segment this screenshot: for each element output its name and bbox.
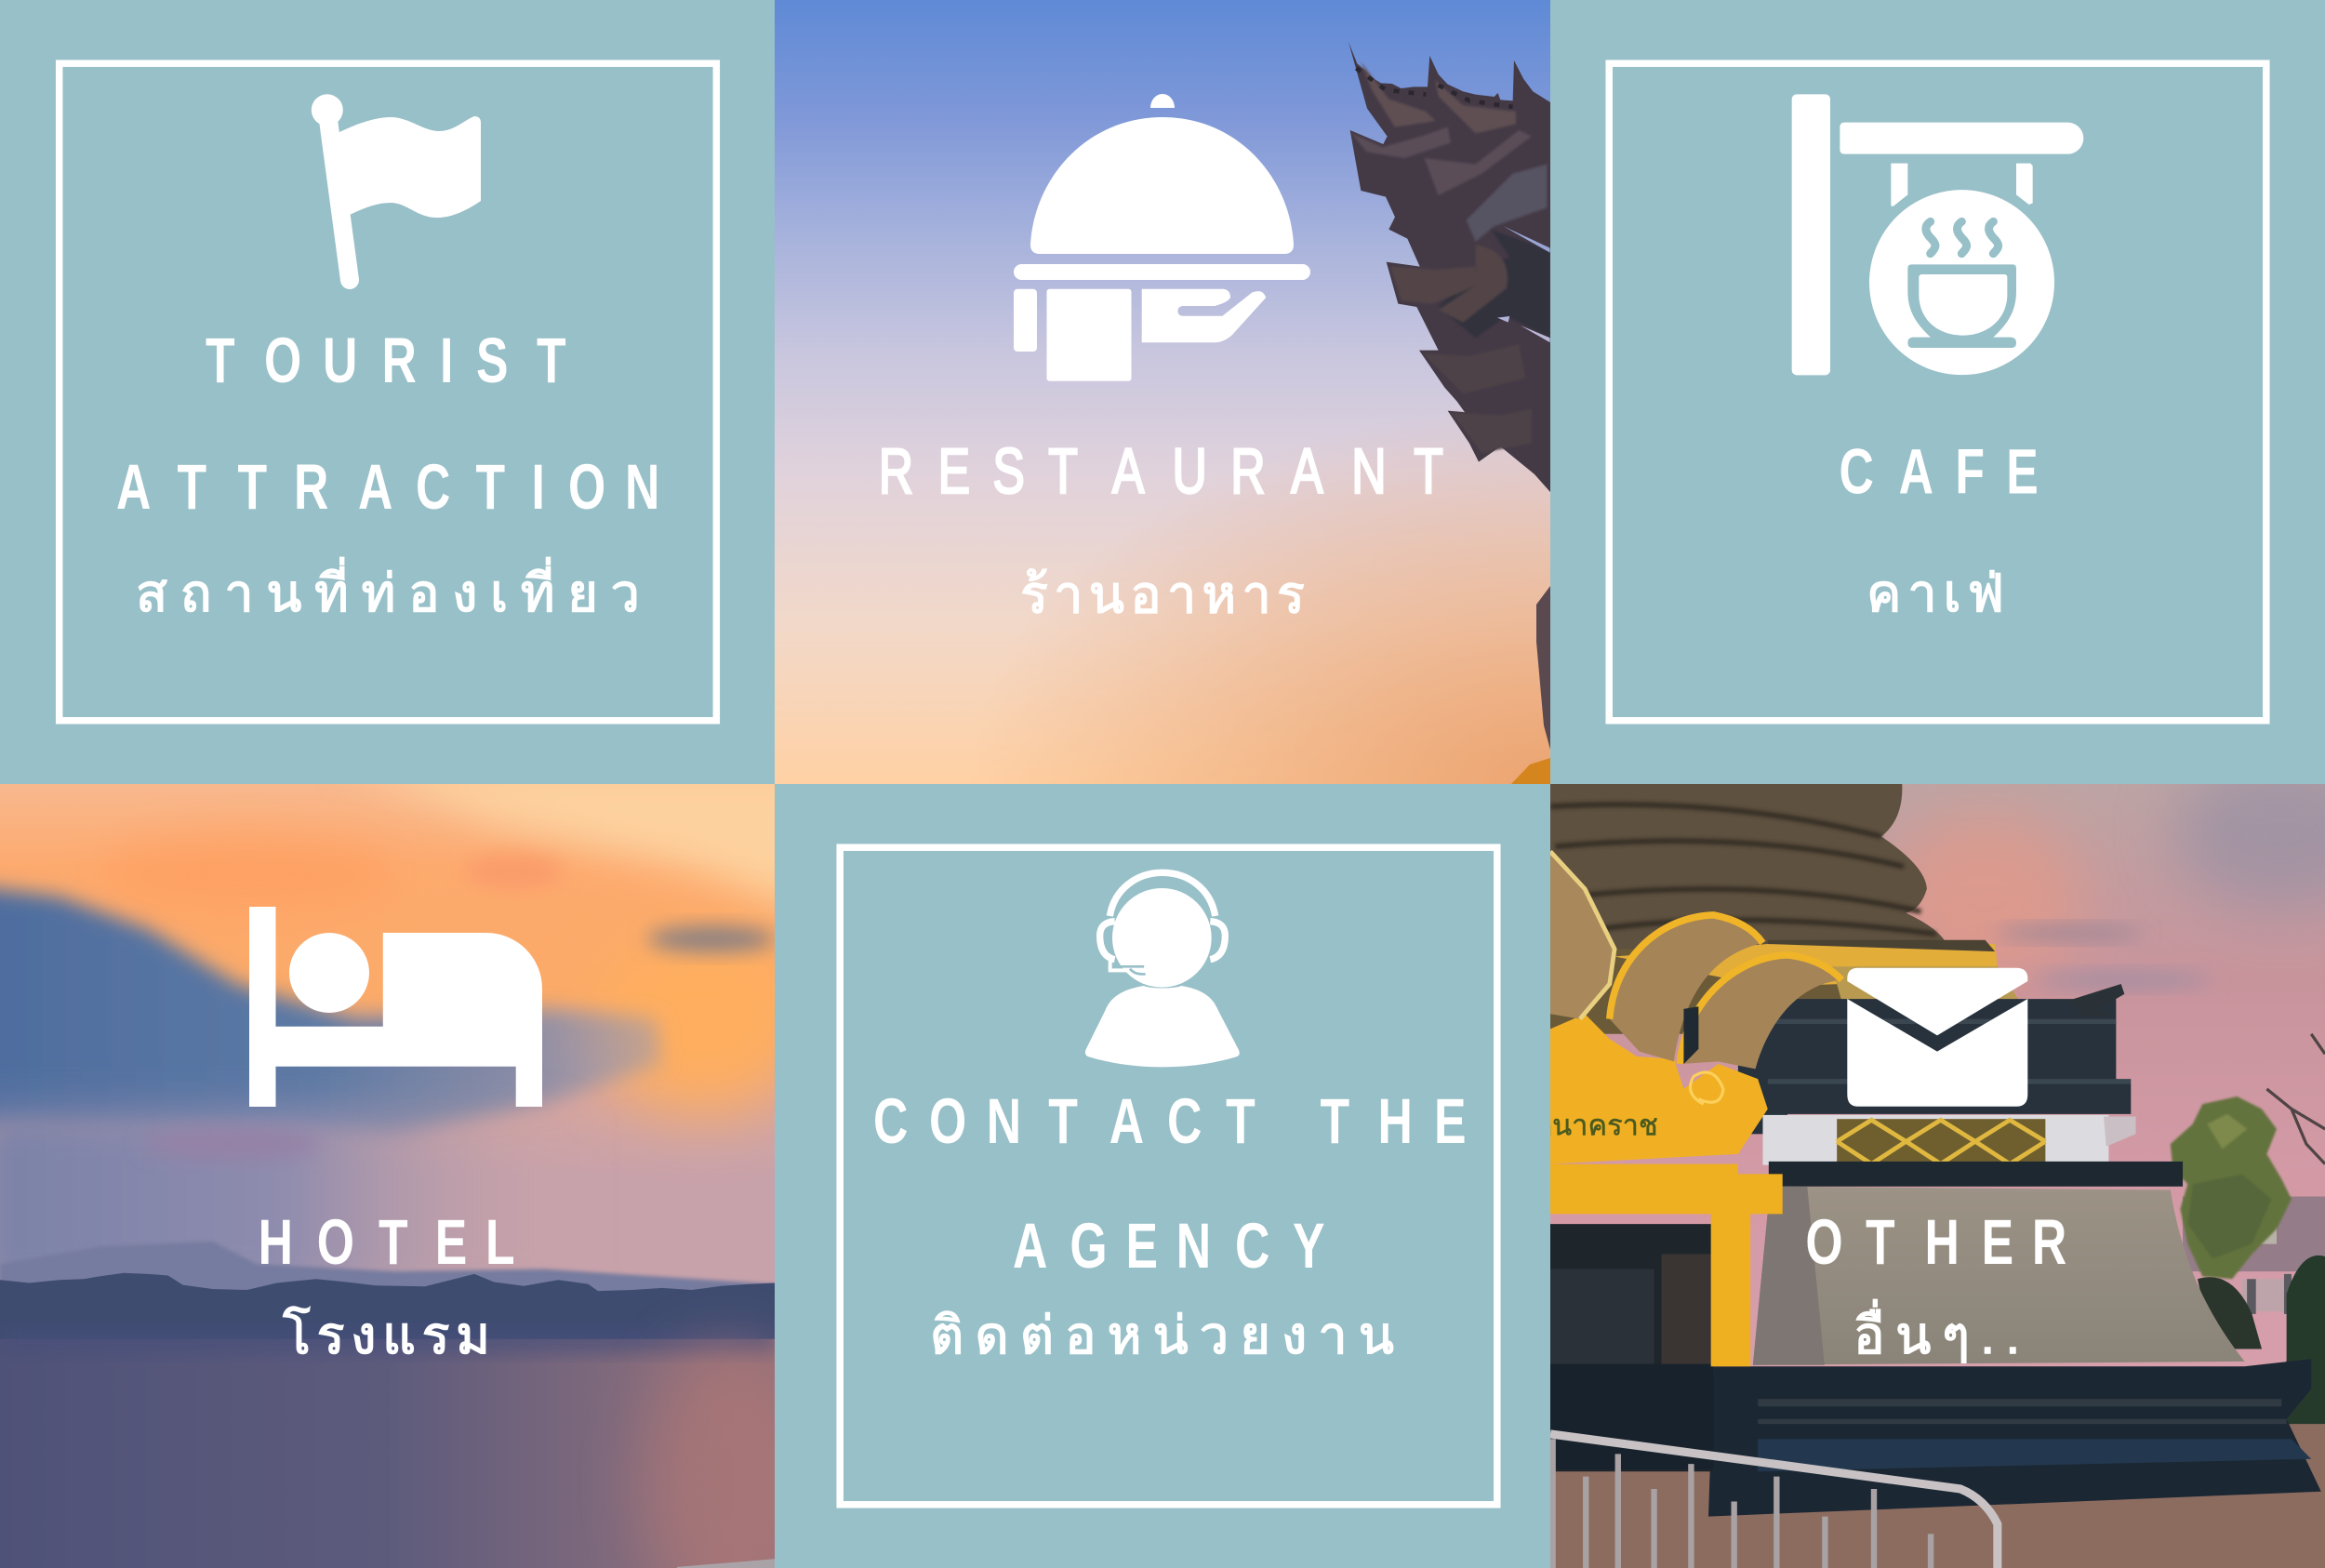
- thai label: tourist attraction: สถานที่ท่องเที่ยว: [136, 557, 640, 622]
- thai label: restaurant: ร้านอาหาร: [1020, 565, 1305, 624]
- photo: temple at dusk: [1550, 784, 2325, 1568]
- heading: contact the agency: CONTACT THE: [873, 1085, 1467, 1157]
- panel: hotel photo: [0, 764, 810, 1568]
- thai label: other: อื่นๆ..: [1853, 1299, 2020, 1364]
- photo: steel railing: [1550, 1434, 1998, 1568]
- thai label: cafe: คาเฟ่: [1867, 564, 2004, 622]
- heading: contact the agency: AGENCY: [1013, 1210, 1324, 1282]
- icon: envelope: [1847, 968, 2027, 1107]
- heading: restaurant: RESTAURANT: [879, 435, 1443, 507]
- photo: distant walkway: [2183, 1197, 2325, 1314]
- panel: cafe: [1550, 0, 2325, 784]
- thai label: hotel: โรงแรม: [283, 1306, 490, 1364]
- heading: tourist attraction: ATTRACTION: [116, 451, 659, 523]
- heading: contact the agency: [873, 1085, 1467, 1282]
- panel: restaurant photo: [775, 0, 1560, 784]
- panel: other photo: [1550, 784, 2325, 1568]
- photo: naga roof carving: [1348, 42, 1560, 502]
- photo: building: [1550, 940, 2244, 1365]
- icon: flag: [312, 94, 481, 280]
- photo: lower statue edge: [1536, 586, 1550, 750]
- icon: bed: [249, 907, 542, 1107]
- photo: stone base and ground: [1550, 1359, 2325, 1568]
- photo: trees: [2171, 1096, 2292, 1279]
- photo: stupa tiers: [1550, 784, 1948, 951]
- photo: sign lettering: ศรีตตนาคราช: [1481, 1109, 1658, 1141]
- icon: cloche on tray with serving hand: [1014, 94, 1310, 381]
- heading: other: OTHER: [1805, 1206, 2066, 1278]
- heading: cafe: CAFE: [1840, 435, 2039, 507]
- heading: tourist attraction: [116, 325, 659, 523]
- photo: sunset lake: [0, 764, 810, 1568]
- photo: orange statue corner: [1511, 758, 1550, 784]
- thai label: contact: ติดต่อหน่วยงาน: [930, 1306, 1394, 1364]
- icon: hanging cafe sign: [1792, 94, 2083, 375]
- panel: tourist attraction: [0, 0, 775, 784]
- icon: agent with headset: [1085, 872, 1240, 1067]
- photo: doorway: [1550, 1224, 1713, 1471]
- heading: hotel: HOTEL: [259, 1206, 515, 1278]
- panel: contact the agency: [775, 784, 1550, 1568]
- heading: tourist attraction: TOURIST: [206, 325, 566, 396]
- photo: yellow gate with naga arches: [1550, 850, 1844, 1367]
